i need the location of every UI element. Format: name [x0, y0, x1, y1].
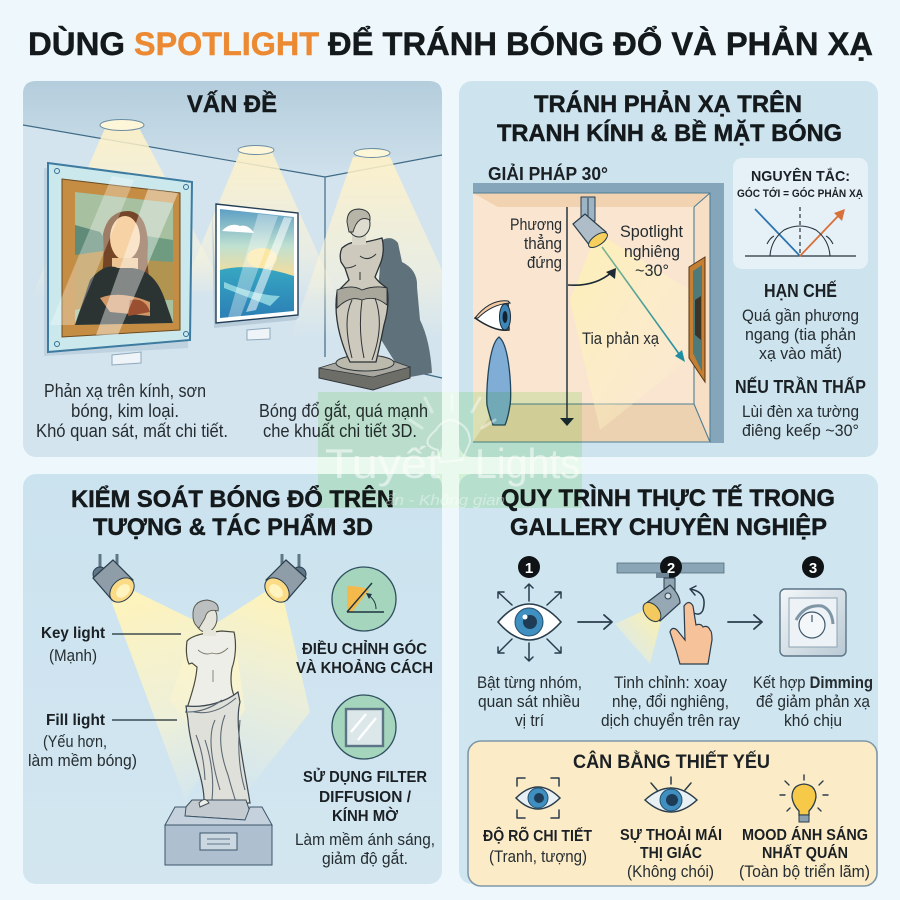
text: reflection problem: Khó quan sát, mất chi tiết. [36, 421, 228, 441]
text: consistent mood: (Toàn bộ triển lãm) [739, 862, 870, 881]
limitation block [742, 280, 859, 363]
text: detail clarity [483, 825, 592, 866]
light beams [112, 590, 310, 800]
low ceiling block [735, 376, 866, 440]
text: shadow problem [259, 400, 428, 441]
arrow 1 [578, 615, 612, 629]
fill light label: làm mềm bóng) [28, 751, 137, 770]
panel: tránh phản xạ [459, 81, 878, 457]
placards [112, 328, 270, 365]
step 3 badge: 3 [809, 560, 817, 577]
icon: focus eye [516, 778, 560, 818]
icon: spotlight adjust with hand [615, 573, 712, 664]
heading: VẤN ĐỀ [187, 90, 277, 118]
text: diffusion filter: Làm mềm ánh sáng, [295, 830, 435, 849]
key light label: Key light [41, 625, 106, 642]
label: spotlight tilt [620, 222, 683, 280]
heading: TƯỢNG & TÁC PHẨM 3D [93, 513, 373, 541]
step 2 text [601, 673, 740, 730]
fill light label [28, 712, 177, 770]
label: vertical: Phương [510, 215, 562, 234]
low ceiling block: điêng keếp ~30° [742, 421, 859, 440]
icon: diffusion filter [332, 695, 396, 759]
text: consistent mood [739, 825, 870, 881]
panel background: gallery wall [23, 81, 442, 457]
text: visual comfort: SỰ THOẢI MÁI [620, 825, 722, 844]
icon: light bulb [780, 775, 828, 822]
panel: kiểm soát bóng đổ [23, 474, 442, 884]
icon: eye with arrows [498, 584, 561, 661]
left spotlight [93, 554, 139, 607]
light cones [30, 120, 442, 340]
pedestal [165, 807, 272, 865]
panel: cân bằng thiết yếu [468, 741, 877, 886]
arrow 2 [728, 615, 762, 629]
step 1 text: vị trí [515, 711, 544, 730]
low ceiling block: Lùi đèn xa tường [742, 402, 859, 421]
label: vertical [510, 215, 562, 272]
text: visual comfort [620, 825, 722, 881]
text: visual comfort: THỊ GIÁC [640, 843, 702, 862]
limitation block: HẠN CHẾ [764, 280, 837, 301]
text: visual comfort: (Không chói) [627, 862, 714, 881]
heading: KIỂM SOÁT BÓNG ĐỔ TRÊN [71, 485, 394, 513]
text: diffusion filter: DIFFUSION / [319, 789, 412, 806]
principle card: GÓC TỚI = GÓC PHẢN XẠ [737, 187, 863, 200]
viewer figure [487, 337, 511, 425]
tilted spotlight [573, 197, 610, 250]
text: reflection problem: bóng, kim loại. [71, 401, 179, 421]
painting: Mona Lisa behind glass [44, 163, 192, 356]
step 3 text: khó chịu [784, 711, 842, 730]
title: ĐỂ TRÁNH BÓNG ĐỔ VÀ PHẢN XẠ [328, 26, 873, 62]
balance heading: CÂN BẰNG THIẾT YẾU [573, 751, 770, 773]
heading [497, 89, 842, 147]
limitation block: xạ vào mắt) [759, 344, 842, 363]
title [28, 26, 873, 62]
text: diffusion filter: SỬ DỤNG FILTER [303, 767, 427, 786]
text: shadow problem: Bóng đổ gắt, quá mạnh [259, 400, 428, 421]
text: detail clarity: (Tranh, tượng) [489, 847, 587, 866]
heading: TRÁNH PHẢN XẠ TRÊN [534, 89, 802, 118]
heading [71, 485, 394, 541]
watermark [318, 392, 582, 509]
step 3 badge [802, 556, 824, 578]
key light label: (Mạnh) [49, 646, 97, 665]
fill light label: (Yếu hơn, [43, 732, 107, 751]
text: diffusion filter: giảm độ gắt. [322, 849, 408, 868]
icon: angle adjust [332, 567, 396, 631]
label: spotlight tilt: nghiêng [624, 242, 680, 261]
subheading: GIẢI PHÁP 30° [488, 163, 608, 184]
reflection law diagram [745, 207, 856, 256]
panel background [23, 474, 442, 884]
text: shadow problem: che khuất chi tiết 3D. [263, 421, 417, 441]
text: adjust angle: VÀ KHOẢNG CÁCH [296, 658, 433, 677]
heading: GALLERY CHUYÊN NGHIỆP [510, 513, 827, 541]
fill light label: Fill light [46, 712, 106, 729]
step 2 text: Tinh chỉnh: xoay [614, 673, 727, 692]
step 3 text [753, 673, 873, 730]
step 2 text: dịch chuyển trên ray [601, 711, 740, 730]
title: SPOTLIGHT [134, 26, 319, 62]
panel: vấn đề [23, 81, 442, 457]
step 2 badge [660, 556, 682, 578]
watermark: Lights [475, 440, 580, 487]
text: consistent mood: NHẤT QUÁN [762, 843, 848, 862]
step 2 badge: 2 [667, 560, 675, 577]
angle arrow [568, 268, 616, 285]
key light label [41, 625, 181, 665]
text: adjust angle [296, 639, 433, 677]
text: consistent mood: MOOD ÁNH SÁNG [742, 825, 868, 844]
painting on wall [689, 257, 705, 382]
step 1 badge [518, 556, 540, 578]
label: vertical: đứng [527, 253, 562, 272]
text: detail clarity: ĐỘ RÕ CHI TIẾT [483, 825, 592, 845]
eye [475, 301, 510, 330]
label: spotlight tilt: Spotlight [620, 222, 683, 241]
title: DÙNG [28, 26, 125, 62]
statue with harsh shadow [319, 209, 432, 390]
label: spotlight tilt: ~30° [635, 261, 669, 280]
balance card background [468, 741, 877, 886]
step 3 text: để giảm phản xạ [756, 692, 870, 711]
text: diffusion filter [295, 767, 435, 868]
label: reflected ray: Tia phản xạ [582, 329, 659, 348]
step 1 badge: 1 [525, 560, 533, 577]
label: vertical: thẳng [524, 234, 562, 253]
step 3 text: Kết hợp Dimming [753, 673, 873, 692]
vertical axis arrow [560, 207, 574, 426]
principle card: NGUYÊN TẮC: [751, 167, 850, 185]
icon: comfortable eye [645, 777, 697, 812]
text: reflection problem: Phản xạ trên kính, sơn [44, 381, 206, 401]
step 2 text: nhẹ, đổi nghiêng, [612, 692, 729, 711]
text: diffusion filter: KÍNH MỜ [332, 806, 398, 825]
right spotlight [260, 554, 306, 607]
step 1 text [477, 673, 582, 730]
panel background [459, 474, 878, 884]
statue: Venus [185, 600, 250, 820]
step 1 text: Bật từng nhóm, [477, 673, 582, 692]
icon: dimmer [780, 589, 846, 656]
watermark: Tuyết [325, 440, 440, 487]
light beam [570, 238, 690, 430]
reflected ray arrow [602, 247, 685, 362]
limitation block: ngang (tia phản [745, 325, 856, 344]
ceiling [23, 81, 442, 177]
step 1 text: quan sát nhiều [478, 692, 580, 711]
text: reflection problem [36, 381, 228, 441]
heading: TRANH KÍNH & BỀ MẶT BÓNG [497, 119, 842, 147]
watermark: ẩn - Không gian [385, 492, 505, 509]
low ceiling block: NẾU TRẦN THẤP [735, 376, 866, 397]
panel: quy trình [459, 474, 878, 886]
heading [501, 484, 835, 541]
principle card [733, 158, 868, 269]
panel background [459, 81, 878, 457]
room cross-section diagram [473, 183, 724, 443]
text: adjust angle: ĐIỀU CHỈNH GÓC [302, 639, 427, 658]
painting: seascape [212, 204, 300, 328]
heading: QUY TRÌNH THỰC TẾ TRONG [501, 484, 835, 512]
limitation block: Quá gần phương [742, 306, 859, 325]
track rail [617, 563, 724, 573]
